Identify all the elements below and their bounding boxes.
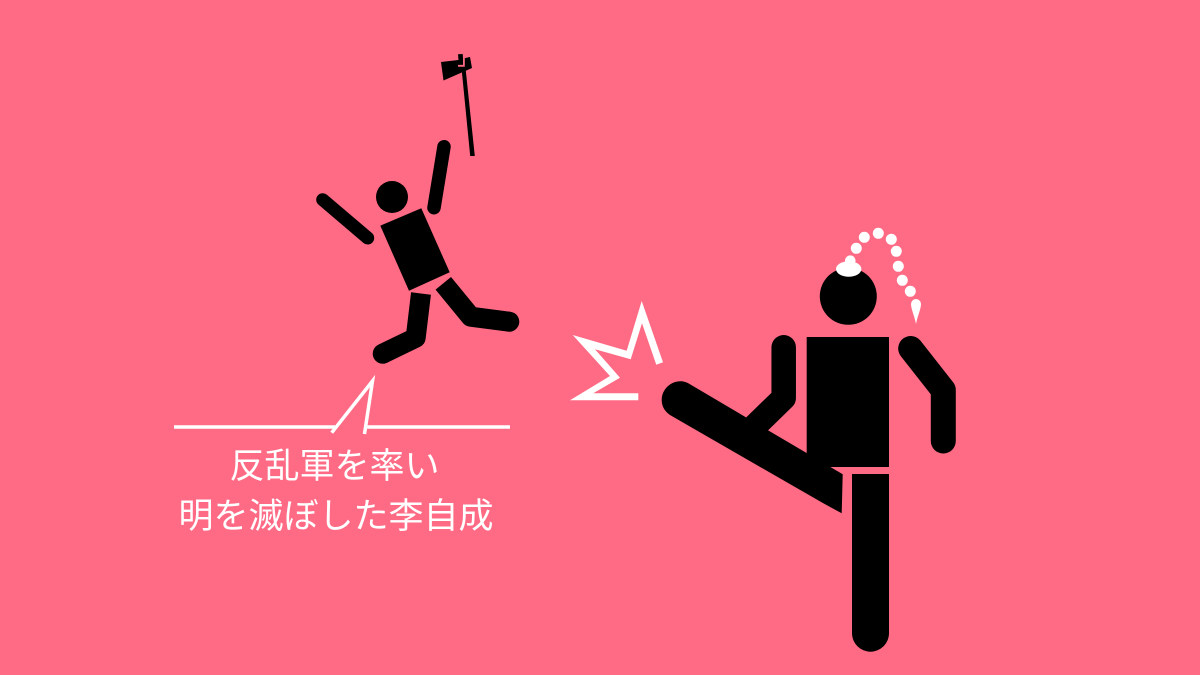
torso	[807, 337, 889, 467]
bent leg, lower left	[383, 294, 421, 354]
ground line with spike	[174, 381, 510, 434]
raised left arm	[323, 200, 368, 238]
figure: rebel leaping with axe	[323, 54, 519, 364]
right arm	[911, 348, 943, 441]
caption: 明を滅ぼした李自成	[178, 497, 494, 536]
raised right arm	[434, 147, 444, 208]
hair bun	[836, 255, 861, 277]
standing leg	[852, 474, 889, 652]
hair: bun and braid	[836, 228, 921, 324]
bent leg, right	[443, 283, 509, 322]
braid tip	[911, 299, 921, 324]
torso	[380, 208, 450, 291]
icon: impact burst	[570, 301, 663, 400]
figure: kicking person	[662, 268, 943, 652]
kicking leg	[662, 381, 843, 513]
head	[376, 181, 408, 213]
caption: 反乱軍を率い	[229, 447, 440, 486]
icon: axe	[441, 54, 475, 156]
caption	[178, 447, 494, 536]
braid beads	[851, 228, 916, 297]
head	[820, 268, 877, 325]
left arm on leg	[747, 347, 784, 434]
